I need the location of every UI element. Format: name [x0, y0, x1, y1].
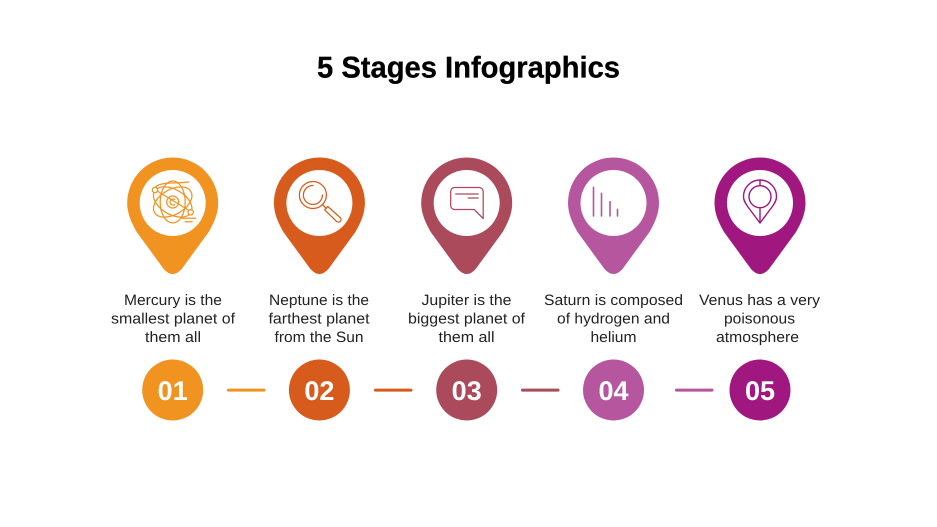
text 3: them all — [438, 329, 494, 346]
connector 3 — [521, 389, 560, 392]
number 4 — [583, 360, 644, 420]
text 3: biggest planet of — [408, 310, 526, 328]
pin 5 — [714, 158, 806, 274]
number 2: 02 — [304, 376, 334, 406]
pin 3 — [421, 158, 512, 274]
stage 3: Jupiter — [408, 158, 526, 420]
text 2 — [268, 292, 370, 346]
text 5 — [699, 292, 821, 346]
icon: atom — [148, 181, 197, 223]
text 2: from the Sun — [274, 329, 364, 346]
text 2: Neptune is the — [269, 292, 369, 309]
number 3 — [436, 360, 497, 420]
connector 1 — [227, 389, 266, 392]
text 5: Venus has a very — [699, 292, 821, 309]
connector 2 — [374, 389, 412, 392]
text 3 — [408, 292, 526, 346]
text 4: of hydrogen and — [557, 310, 670, 328]
icon: magnifier — [299, 182, 341, 222]
icon: speech bubble — [451, 188, 483, 218]
pin 1 — [127, 158, 218, 274]
number 5: 05 — [745, 376, 775, 406]
text 1: them all — [145, 329, 201, 346]
number 4: 04 — [598, 376, 629, 406]
text 5: poisonous — [724, 310, 795, 328]
stage 5: Venus — [699, 158, 821, 420]
text 4: Saturn is composed — [544, 292, 683, 309]
number 2 — [289, 360, 350, 420]
number 1 — [142, 360, 203, 420]
text 1: smallest planet of — [111, 310, 236, 328]
icon: bar chart — [594, 187, 618, 216]
text 1 — [111, 292, 236, 346]
pin 4 — [568, 158, 659, 274]
connector 4 — [675, 389, 714, 392]
text 4: helium — [590, 329, 636, 346]
stage 2: Neptune — [268, 158, 370, 420]
number 1: 01 — [158, 376, 188, 406]
number 5 — [730, 360, 790, 420]
text 3: Jupiter is the — [422, 292, 512, 309]
pin 2 — [274, 158, 365, 274]
stage 1: Mercury — [111, 158, 236, 420]
icon: location marker — [744, 180, 776, 223]
text 1: Mercury is the — [124, 292, 222, 309]
text 5: atmosphere — [716, 329, 799, 346]
text 4 — [544, 292, 683, 346]
number 3: 03 — [452, 376, 482, 406]
text 2: farthest planet — [268, 310, 370, 328]
title: 5 Stages Infographics — [317, 52, 620, 84]
stage 4: Saturn — [544, 158, 683, 420]
